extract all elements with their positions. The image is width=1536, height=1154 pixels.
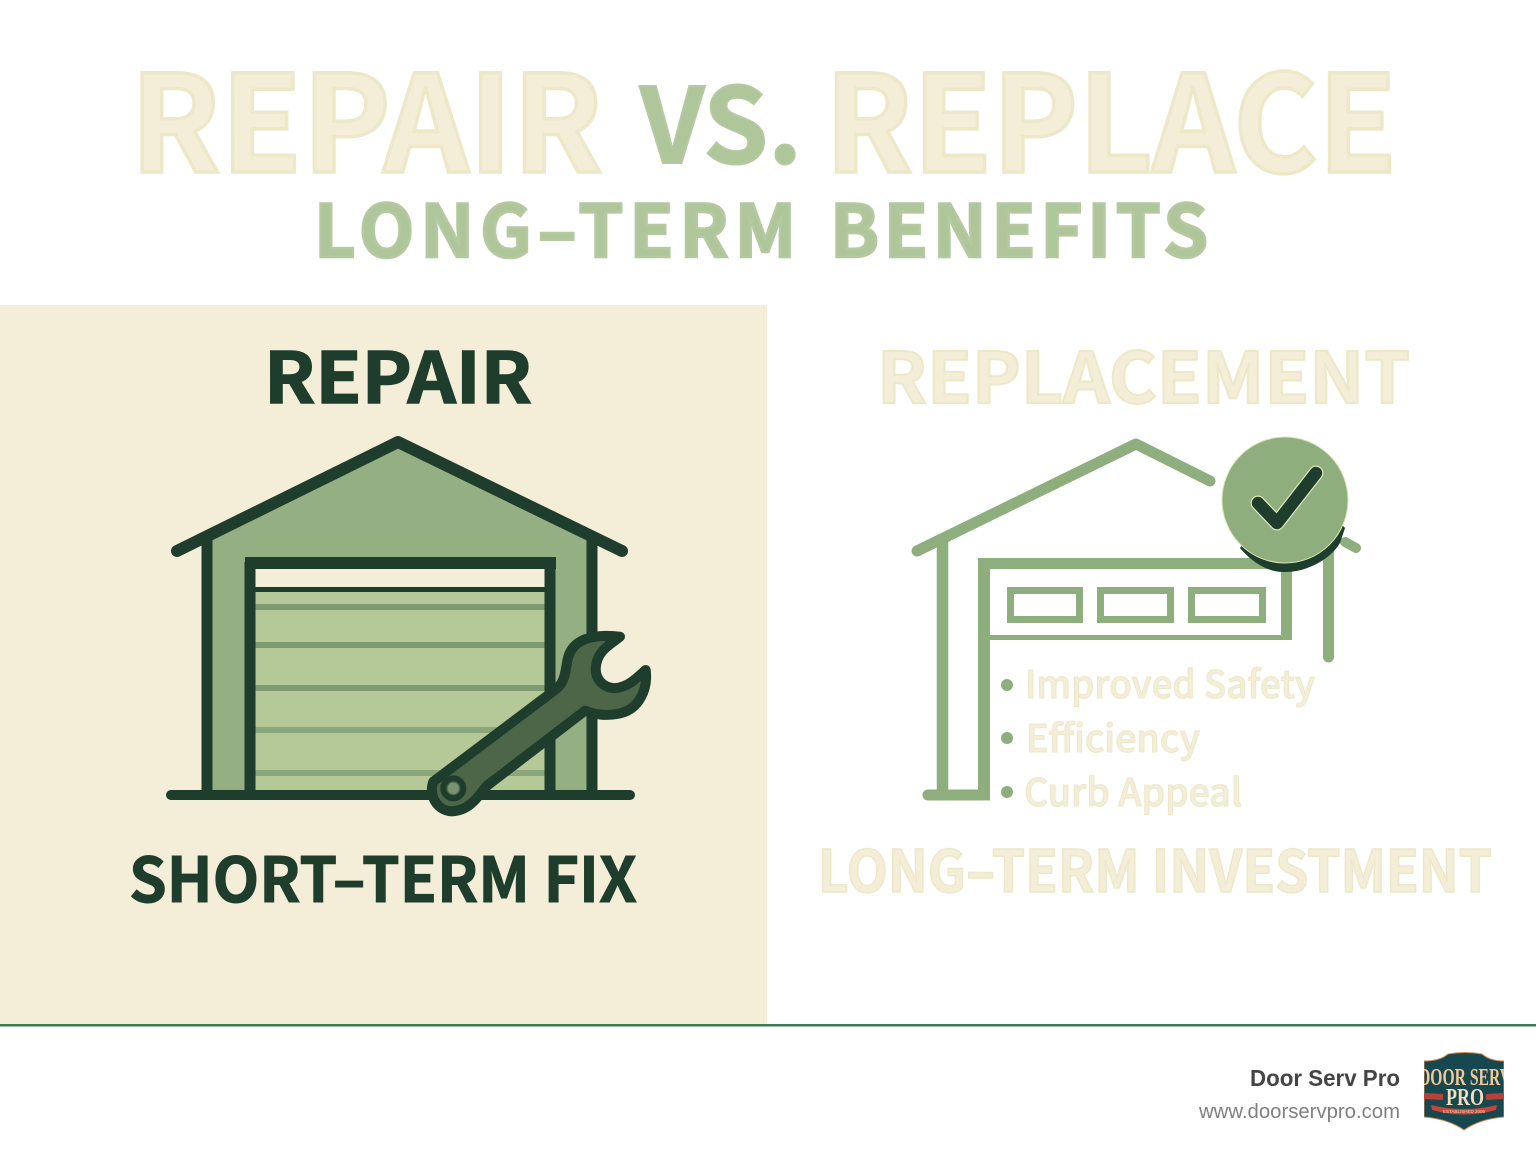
title block <box>130 17 1397 278</box>
panel background <box>0 305 767 1024</box>
panel heading: repair: REPAIR <box>264 323 532 424</box>
icon: garage with wrench <box>171 442 646 811</box>
garage door windows <box>1010 590 1262 620</box>
garage outline <box>171 442 630 795</box>
benefit: curb appeal: Curb Appeal <box>1024 762 1242 817</box>
logo badge <box>1424 1052 1504 1130</box>
panel heading: replacement: REPLACEMENT <box>877 323 1410 424</box>
title word: REPAIR: REPAIR <box>130 17 603 211</box>
icon: garage with check badge <box>917 437 1356 800</box>
logo badge: ESTABLISHED 2006 <box>1443 1109 1485 1114</box>
subtitle words: long-term: LONG–TERM <box>314 173 796 278</box>
panel: repair <box>0 305 767 1024</box>
subtitle word: benefits: BENEFITS <box>830 173 1208 278</box>
check badge <box>1222 437 1348 572</box>
footer rule <box>0 1024 1536 1026</box>
panel caption: long-term investment: LONG–TERM INVESTMENT <box>818 825 1492 909</box>
icon: wrench <box>432 636 646 811</box>
garage outline <box>917 444 1356 800</box>
footer brand <box>1198 1052 1511 1130</box>
panel: replacement <box>818 323 1492 909</box>
panel caption: short-term fix: SHORT–TERM FIX <box>129 830 637 920</box>
garage door panel <box>255 569 545 791</box>
garage wall fill <box>212 447 587 791</box>
brand name: Door Serv Pro <box>1250 1065 1400 1091</box>
logo badge: PRO <box>1446 1085 1484 1111</box>
title word: VS.: VS. <box>639 42 802 193</box>
subtitle <box>314 173 1208 278</box>
title word: REPLACE: REPLACE <box>825 17 1397 211</box>
benefit: improved safety: Improved Safety <box>1025 654 1315 709</box>
benefit: efficiency: Efficiency <box>1026 708 1200 763</box>
benefits list <box>1001 654 1315 817</box>
brand website: www.doorservpro.com <box>1198 1101 1400 1123</box>
